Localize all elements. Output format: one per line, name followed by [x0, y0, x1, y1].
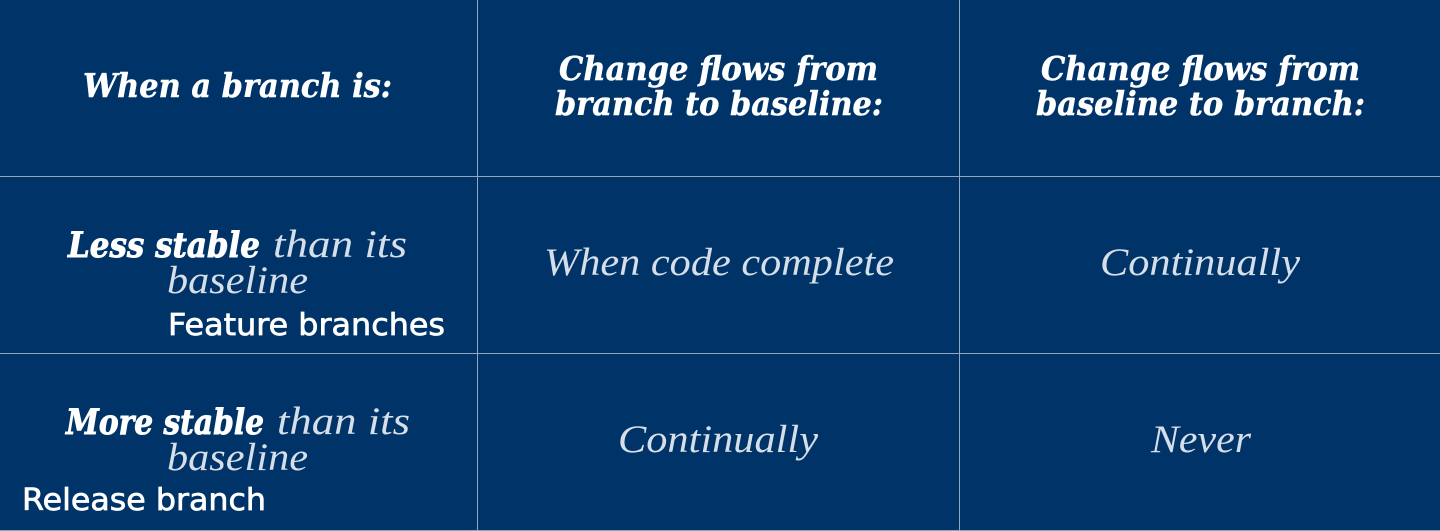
heading: change flows from branch to baseline [555, 49, 883, 123]
heading: when a branch is: When a branch is: [83, 66, 392, 105]
cell: continually, branch to baseline: Continually [618, 418, 819, 461]
heading: change flows from branch to baseline: Change flows from [559, 49, 878, 88]
heading: change flows from baseline to branch: baseline to branch: [1036, 84, 1365, 123]
cell: never: Never [1150, 418, 1252, 461]
row label: more stable than its baseline: baseline [167, 436, 308, 479]
cell: when code complete: When code complete [544, 241, 894, 284]
heading: change flows from baseline to branch: Change flows from [1041, 49, 1360, 88]
row label: less stable than its baseline: Less stable [67, 225, 260, 266]
heading: change flows from baseline to branch [1036, 49, 1365, 123]
handwritten note: feature branches: Feature branches [168, 308, 445, 343]
row label: more stable than its baseline: than its [277, 400, 410, 443]
row label: less stable than its baseline: baseline [167, 259, 308, 302]
cell: continually, baseline to branch: Continually [1100, 241, 1301, 284]
row label: less stable than its baseline: than its [273, 223, 407, 266]
row label: less stable than its baseline [67, 223, 407, 302]
handwritten note: release branch: Release branch [22, 483, 266, 518]
heading: change flows from branch to baseline: branch to baseline: [555, 84, 883, 123]
row label: more stable than its baseline [65, 400, 410, 479]
row label: more stable than its baseline: More stable [65, 402, 264, 443]
